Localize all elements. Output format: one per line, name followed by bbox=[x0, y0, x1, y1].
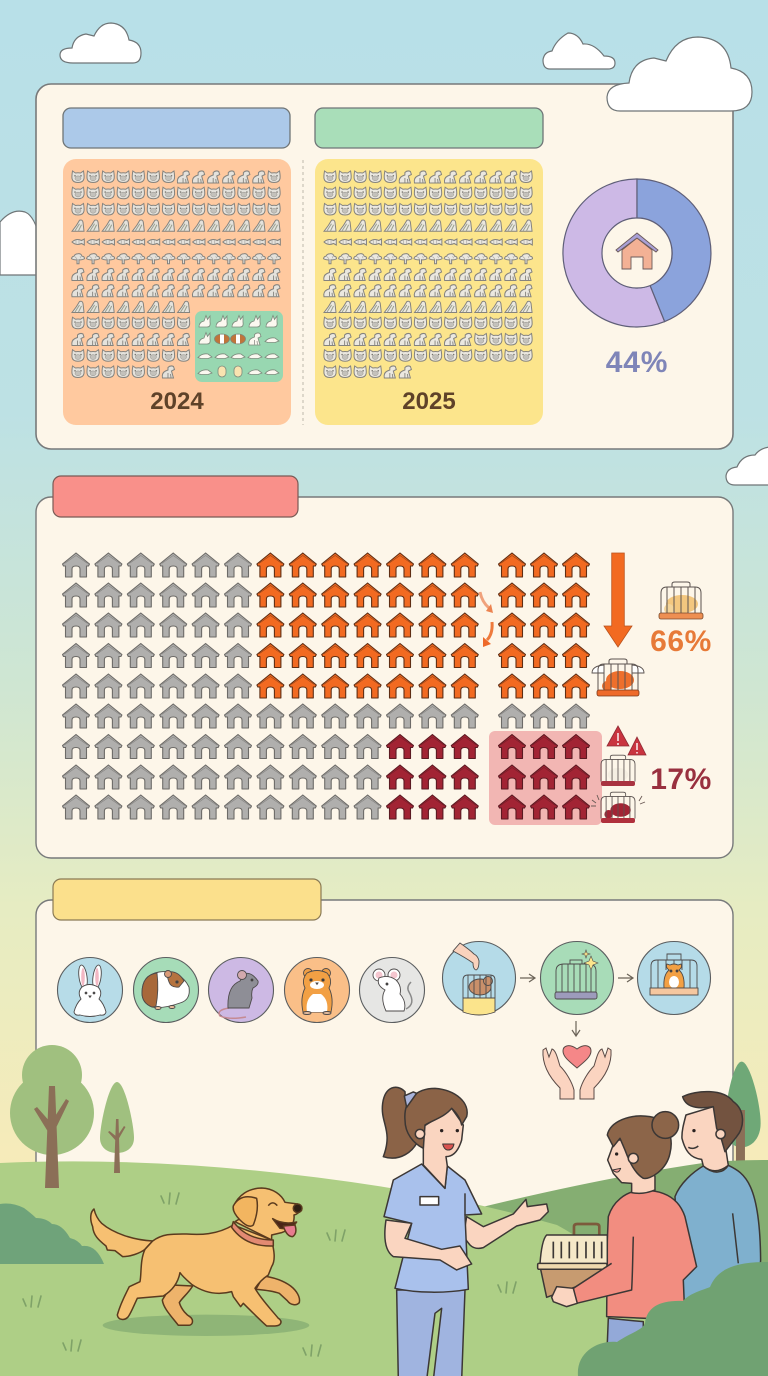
icon: step 1, surrender to cage bbox=[442, 942, 516, 1015]
tree: small left bbox=[100, 1082, 134, 1173]
small curved arrows bbox=[480, 592, 493, 647]
heading bar: adoption bbox=[53, 879, 321, 920]
person: nurse in blue scrubs bbox=[382, 1087, 548, 1376]
year card: 2025 bbox=[315, 159, 543, 425]
heading bar: outcomes bbox=[53, 476, 298, 517]
cloud: top middle bbox=[543, 33, 615, 69]
icon: hands holding heart bbox=[543, 1046, 611, 1099]
arrow: step 1 to 2 bbox=[520, 974, 535, 982]
cloud: top left bbox=[60, 23, 141, 63]
icon: warning triangles bbox=[607, 726, 646, 755]
hill: front light green bbox=[0, 1161, 700, 1376]
arrow: big downward bbox=[604, 553, 632, 647]
stat: 44%: 44% bbox=[606, 346, 668, 379]
person: woman with carrier bbox=[538, 1112, 697, 1343]
grass tufts bbox=[23, 1193, 516, 1356]
arrow: step 2 to 3 bbox=[618, 974, 633, 982]
icon: home in donut centre bbox=[616, 233, 658, 269]
icon grid: 2025 animals bbox=[324, 171, 533, 378]
icon: rat bbox=[208, 958, 274, 1022]
icon: rabbit bbox=[58, 958, 122, 1022]
icon: cage, pale animal bbox=[601, 755, 635, 786]
pet carrier bbox=[538, 1224, 607, 1297]
donut chart: 44% share bbox=[563, 179, 711, 327]
hill: back dark green bbox=[470, 1160, 768, 1376]
cloud: left edge bbox=[0, 211, 40, 275]
icon: guinea pig bbox=[134, 958, 198, 1022]
highlight behind critical homes bbox=[489, 731, 602, 825]
stat: 66%: 66% bbox=[650, 625, 712, 658]
heading bar: 2025 bbox=[315, 108, 543, 148]
icon grid: 2024 animals bbox=[72, 171, 281, 378]
bush: left bbox=[0, 1204, 104, 1264]
cloud: right edge bbox=[726, 447, 768, 485]
icon: white mouse bbox=[360, 958, 424, 1022]
divider between years bbox=[302, 160, 304, 425]
year label: 2024: 2024 bbox=[150, 388, 204, 415]
panel: small animals and adoption bbox=[36, 879, 733, 1320]
icon: cage, red animal with alert marks bbox=[591, 792, 645, 823]
highlight: small animals patch bbox=[195, 311, 283, 382]
tree: right background bbox=[725, 1062, 761, 1173]
house grid: 144 homes bbox=[62, 553, 590, 819]
panel: shelter housing outcomes bbox=[36, 476, 733, 858]
arrow: step 2 down to care bbox=[572, 1021, 580, 1036]
year card: 2024 bbox=[63, 159, 291, 425]
bush: right foreground bbox=[578, 1262, 768, 1376]
panel: 2024 vs 2025 intake bbox=[36, 84, 733, 449]
tree: large left bbox=[10, 1045, 94, 1188]
icon: cage, orange animal bbox=[592, 659, 644, 696]
stat: 17%: 17% bbox=[650, 763, 712, 796]
cloud: overlapping panel corner bbox=[607, 37, 752, 111]
dog: golden retriever bbox=[91, 1188, 309, 1336]
icon: step 3, new home cage bbox=[638, 942, 710, 1014]
icon: cage, outlined animal bbox=[659, 582, 703, 619]
icon: step 2, clean cage bbox=[540, 942, 614, 1014]
heading bar: 2024 bbox=[63, 108, 290, 148]
dog shadow bbox=[103, 1315, 309, 1336]
person: man in blue sweater bbox=[675, 1092, 761, 1360]
year label: 2025: 2025 bbox=[402, 388, 456, 415]
icon: hamster bbox=[284, 958, 350, 1022]
